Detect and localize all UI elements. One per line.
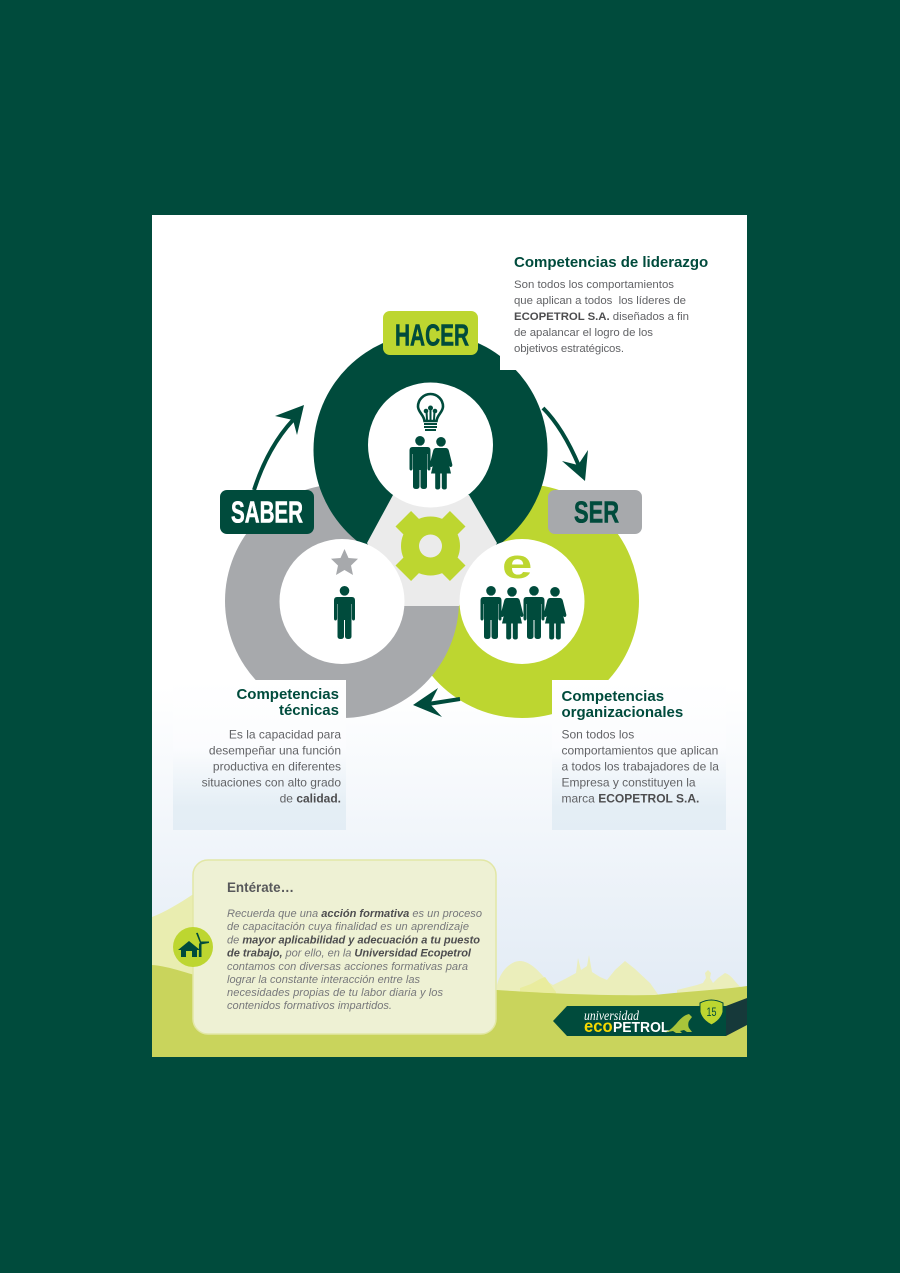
- body: organizacionales: comportamientos que aplican: [562, 744, 718, 758]
- heading: organizacionales: Competencias: [562, 688, 664, 705]
- body: tecnicas: de calidad.: [280, 792, 341, 806]
- icon: central gear: [376, 492, 485, 600]
- body: liderazgo: objetivos estratégicos.: [514, 343, 624, 355]
- page number shield: 15: [706, 1005, 717, 1019]
- label: SER: [548, 490, 642, 534]
- label: SABER: SABER: [231, 494, 303, 530]
- landscape hills: [152, 894, 747, 1000]
- central panel: [367, 495, 497, 606]
- arrow: saber to hacer: [254, 405, 304, 490]
- body: organizacionales: Empresa y constituyen la: [562, 776, 696, 790]
- body: organizacionales: marca ECOPETROL S.A.: [562, 792, 699, 806]
- body: tecnicas: desempeñar una función: [209, 744, 341, 758]
- logo text: eco: eco: [584, 1017, 613, 1036]
- body: liderazgo: [514, 279, 689, 355]
- arrow: ser to saber: [413, 688, 460, 717]
- heading: organizacionales: organizacionales: [562, 704, 683, 721]
- circle: SABER grey: [225, 484, 459, 718]
- body: liderazgo: de apalancar el logro de los: [514, 327, 653, 339]
- icon: star: [331, 549, 358, 575]
- page number shield: [700, 1000, 723, 1025]
- body: tecnicas: [202, 728, 341, 806]
- body: Enterate: Recuerda que una acción formativa es un proceso: [227, 908, 482, 920]
- arrow: hacer to ser: [543, 408, 588, 481]
- logo text: PETROL: PETROL: [613, 1020, 670, 1036]
- body: tecnicas: situaciones con alto grado: [202, 776, 341, 790]
- body: Enterate: necesidades propias de tu labor diaria y los: [227, 987, 443, 999]
- heading: liderazgo: Competencias de liderazgo: [514, 254, 708, 271]
- label: HACER: [383, 311, 478, 355]
- body: tecnicas: productiva en diferentes: [213, 760, 341, 774]
- icon: group of people: [480, 586, 566, 640]
- page panel: [152, 215, 747, 1057]
- text panel: liderazgo: [514, 254, 708, 355]
- panel: competencias organizacionales: [552, 680, 726, 830]
- venn diagram: [225, 300, 700, 718]
- icon: single person: [334, 586, 355, 639]
- icon: light bulb: [418, 394, 443, 430]
- body: Enterate: contenidos formativos impartidos.: [227, 1000, 392, 1012]
- body: liderazgo: que aplican a todos los líderes de: [514, 295, 686, 307]
- callout: Enterate: [193, 860, 496, 1034]
- label: HACER: HACER: [395, 317, 469, 353]
- body: Enterate: lograr la constante interacción entre las: [227, 974, 420, 986]
- icon: couple: [410, 436, 452, 490]
- notch behind liderazgo text: [500, 300, 700, 370]
- label: SABER: [220, 490, 314, 534]
- icon: house and wind turbine: [173, 927, 213, 967]
- body: liderazgo: ECOPETROL S.A. diseñados a fin: [514, 311, 689, 323]
- body: organizacionales: a todos los trabajadores de la: [562, 760, 719, 774]
- white disc: SABER: [280, 539, 404, 664]
- ribbon: Universidad Ecopetrol logo: [553, 998, 747, 1036]
- heading: tecnicas: técnicas: [279, 702, 339, 719]
- body: liderazgo: Son todos los comportamientos: [514, 279, 674, 291]
- label: SER: SER: [574, 495, 619, 529]
- body: organizacionales: Son todos los: [562, 728, 634, 742]
- white disc: HACER: [368, 382, 493, 508]
- body: tecnicas: Es la capacidad para: [229, 728, 341, 742]
- circle: HACER dark: [314, 333, 548, 567]
- ground: [152, 965, 747, 1057]
- body: Enterate: de trabajo, por ello, en la Universidad Ecopetrol: [227, 948, 472, 960]
- circle: SER green: [405, 484, 639, 718]
- body: Enterate: contamos con diversas acciones formativas para: [227, 961, 468, 973]
- white disc: SER: [460, 539, 584, 664]
- body: Enterate: [227, 908, 482, 1012]
- icon: iguana: [662, 1014, 692, 1033]
- icon: letter e: e: [502, 541, 532, 587]
- logo text: universidad: universidad: [584, 1009, 640, 1024]
- heading: tecnicas: Competencias: [236, 686, 339, 703]
- body: Enterate: de mayor aplicabilidad y adecuación a tu puesto: [227, 934, 480, 946]
- heading: Enterate: Entérate…: [227, 880, 294, 895]
- body: Enterate: de capacitación cuya finalidad es un aprendizaje: [227, 921, 469, 933]
- panel: competencias tecnicas: [173, 680, 346, 830]
- body: organizacionales: [562, 728, 719, 806]
